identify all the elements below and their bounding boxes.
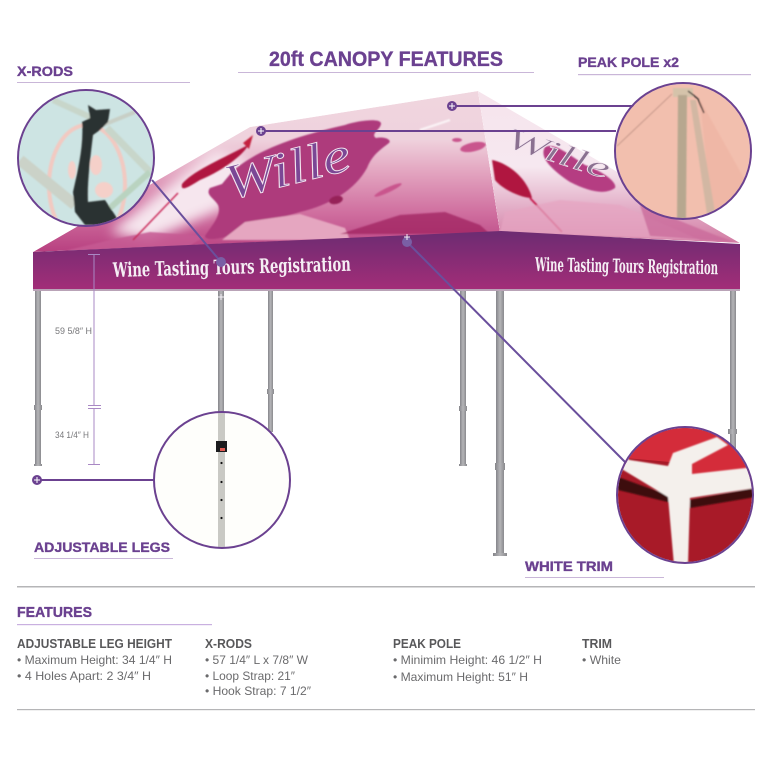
callout: white trim photo xyxy=(615,425,755,565)
features: peak pole: PEAK POLE xyxy=(393,637,461,651)
heading: white trim: WHITE TRIM xyxy=(525,558,613,574)
callout: adjustable legs photo xyxy=(154,410,290,550)
features: peak pole: • Minimim Height: 46 1/2″ H xyxy=(393,653,542,667)
canopy roof front face xyxy=(33,91,500,252)
callout: x-rods photo xyxy=(17,89,155,227)
heading: x-rods: X-RODS xyxy=(17,63,73,79)
logo: Wille xyxy=(218,125,356,211)
features: x-rods xyxy=(205,637,312,698)
features: peak pole xyxy=(393,637,542,684)
label: 34 1/4 H: 34 1/4″ H xyxy=(55,430,89,440)
features: adjustable leg height xyxy=(17,637,172,683)
canopy roof side face xyxy=(478,91,740,243)
features: trim: TRIM xyxy=(582,637,612,651)
legs xyxy=(34,290,737,556)
features: x-rods: • 57 1/4″ L x 7/8″ W xyxy=(205,653,309,667)
features: trim xyxy=(582,637,621,667)
canopy valance xyxy=(33,231,501,290)
heading: adjustable legs: ADJUSTABLE LEGS xyxy=(34,539,170,555)
label: 59 5/8 H: 59 5/8″ H xyxy=(55,326,92,336)
canopy xyxy=(33,91,740,291)
features: x-rods: X-RODS xyxy=(205,637,252,651)
features: adjustable leg height: • Maximum Height: 34 1/4″ H xyxy=(17,653,172,667)
features: x-rods: • Hook Strap: 7 1/2″ xyxy=(205,684,312,698)
features: adjustable leg height: • 4 Holes Apart: 2 3/4″ H xyxy=(17,669,151,683)
logo side: Wille xyxy=(502,121,615,186)
heading: white trim xyxy=(525,558,664,578)
callout lines xyxy=(37,106,634,480)
height dimension xyxy=(88,254,101,464)
markers xyxy=(32,101,457,485)
heading: peak pole: PEAK POLE x2 xyxy=(578,54,679,70)
features: trim: • White xyxy=(582,653,621,667)
callout: peak pole photo xyxy=(615,83,751,220)
title: 20ft CANOPY FEATURES xyxy=(269,48,503,71)
valance text left: Wine Tasting Tours Registration xyxy=(112,252,351,282)
features: adjustable leg height: ADJUSTABLE LEG HEIGHT xyxy=(17,637,172,651)
heading: features: FEATURES xyxy=(17,605,92,621)
features: peak pole: • Maximum Height: 51″ H xyxy=(393,670,528,684)
features: x-rods: • Loop Strap: 21″ xyxy=(205,669,296,683)
